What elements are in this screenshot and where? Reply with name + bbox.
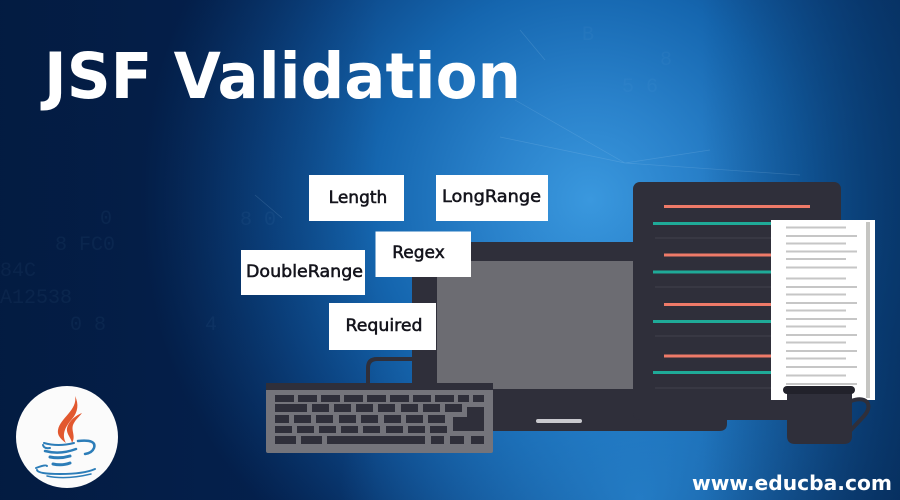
label: Required: Required	[346, 316, 422, 336]
label: DoubleRange: DoubleRange	[246, 262, 363, 282]
background: 5 6	[622, 76, 658, 99]
illustration: keyboard cable	[368, 359, 412, 383]
background: 0	[100, 208, 112, 231]
label: Regex: Regex	[392, 243, 445, 263]
label: Regex	[376, 232, 471, 277]
illustration: paper document	[771, 220, 875, 400]
background: 8	[660, 49, 672, 72]
label: LongRange	[436, 175, 548, 221]
background: 0 8	[70, 314, 106, 337]
illustration: tablet with code lines	[633, 182, 841, 420]
title: JSF Validation	[40, 40, 521, 113]
background: 8 0	[240, 209, 276, 232]
background: A12538	[0, 287, 72, 310]
label: Length	[309, 175, 404, 221]
illustration: laptop	[412, 242, 727, 431]
logo: Java	[16, 386, 118, 488]
label: Length: Length	[329, 188, 387, 208]
website url: www.educba.com	[692, 471, 892, 495]
background: 4	[205, 314, 217, 337]
label: LongRange: LongRange	[442, 187, 541, 207]
illustration: coffee mug	[783, 386, 868, 444]
illustration: keyboard	[266, 383, 493, 453]
label: DoubleRange	[241, 250, 365, 295]
background: 8 FC0	[55, 234, 115, 257]
background: 84C	[0, 260, 36, 283]
background: B	[582, 24, 594, 47]
label: Required	[329, 303, 436, 350]
